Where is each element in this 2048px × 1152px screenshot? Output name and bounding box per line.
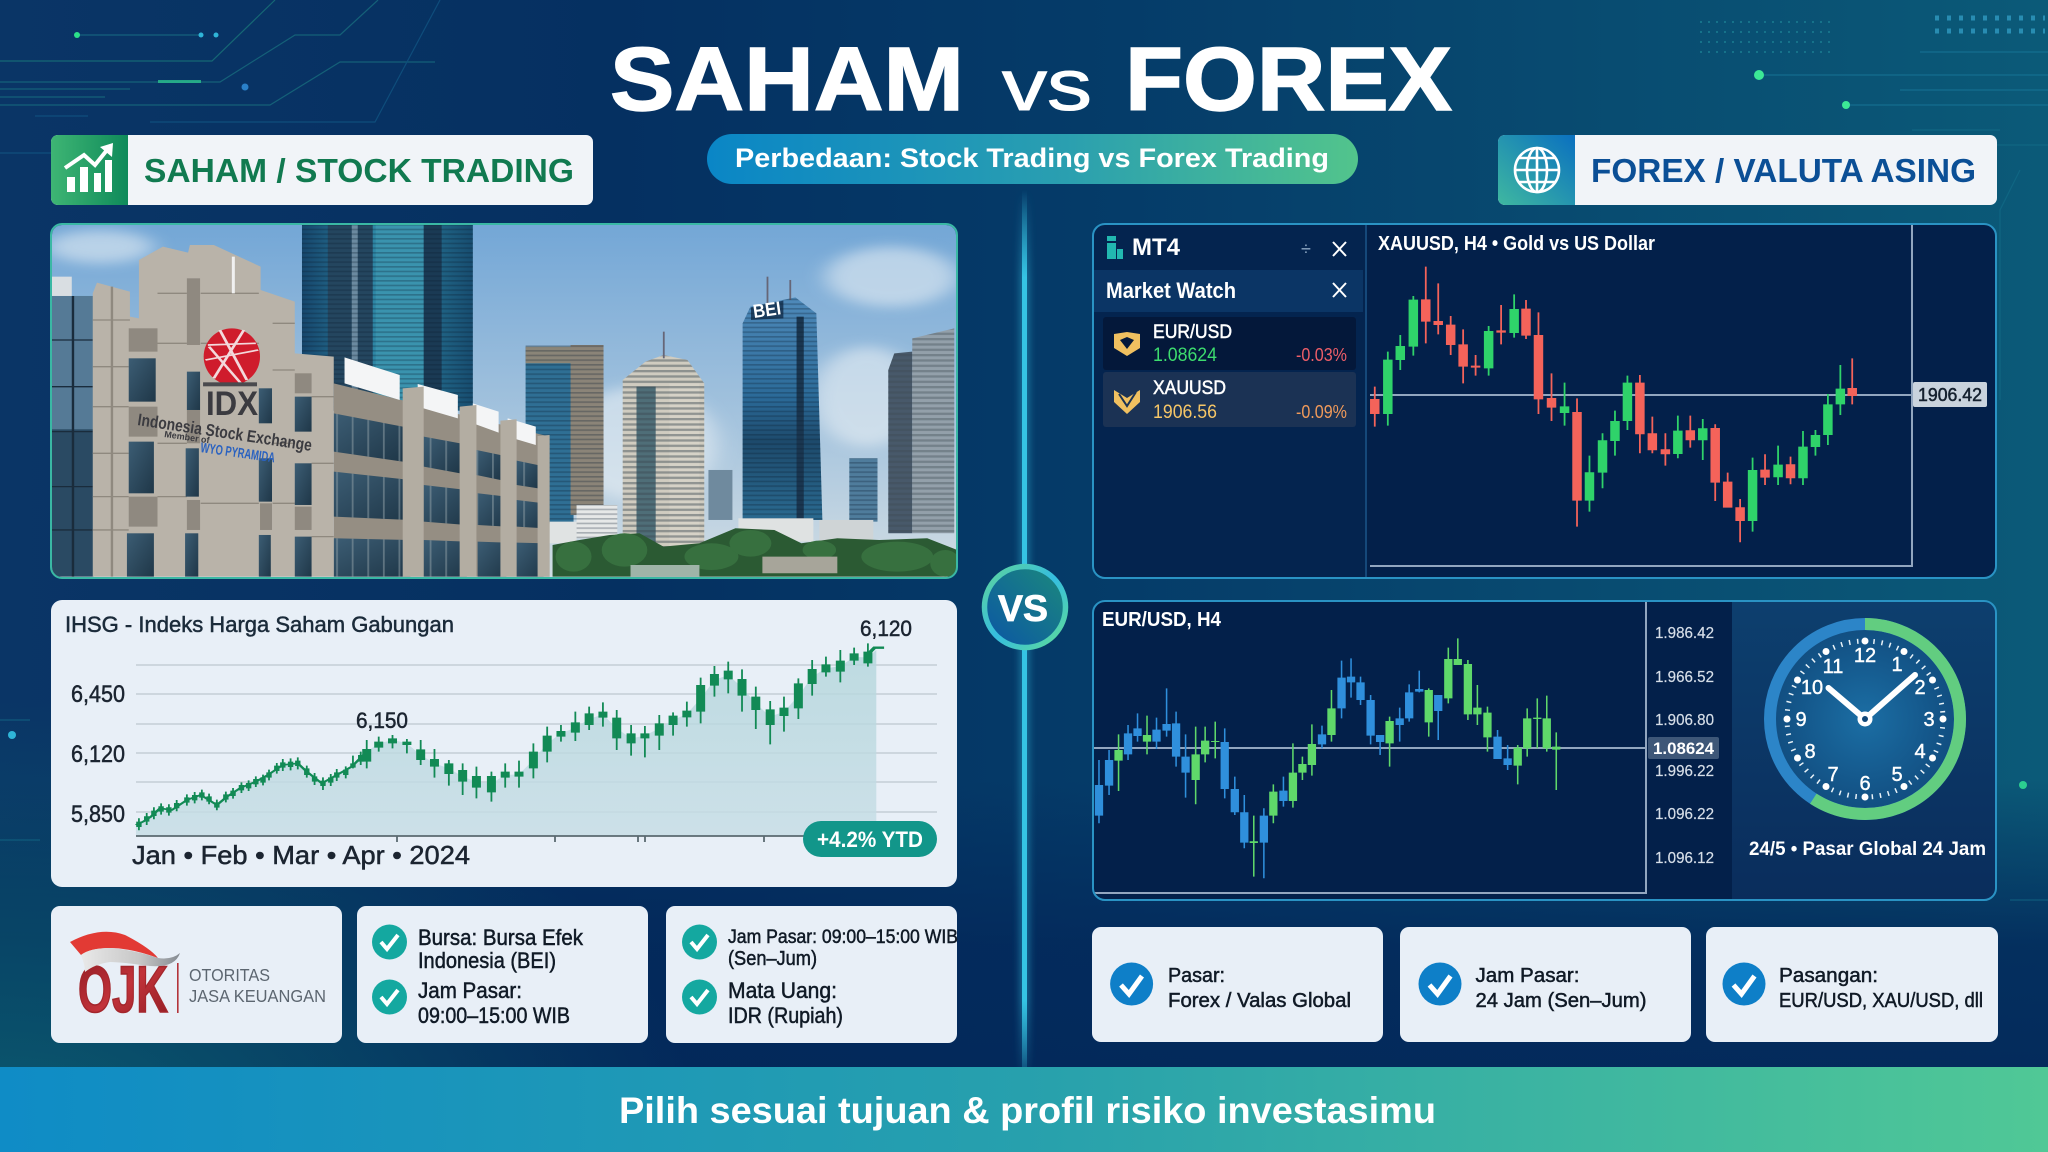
- icon: check: [1722, 962, 1766, 1006]
- card text: IDR (Rupiah): [728, 1003, 843, 1028]
- card: OJK logo: OTORITAS: [189, 965, 270, 985]
- chart frame: [1370, 224, 1912, 566]
- card text: 09:00–15:00 WIB: [418, 1003, 570, 1028]
- row: XAUUSD: 1906.56: [1153, 402, 1217, 423]
- header: forex / valuta asing: FOREX / VALUTA ASING: [1591, 152, 1976, 189]
- card text: Indonesia (BEI): [418, 948, 556, 973]
- icon: clock: 1: [1891, 654, 1903, 676]
- icon: rising chart: [65, 143, 113, 192]
- price axis labels: 1.996.22: [1655, 763, 1714, 780]
- icon: close: [1333, 242, 1346, 256]
- price axis labels: 1.966.52: [1655, 669, 1714, 686]
- price label: 1.08624: [1653, 739, 1715, 758]
- price label: 1906.42: [1918, 385, 1982, 405]
- card text: EUR/USD, XAU/USD, dll: [1779, 990, 1983, 1012]
- IDX sphere: [204, 328, 260, 385]
- VS badge: VS: [998, 588, 1048, 629]
- sidebar: MT4: [1132, 234, 1181, 261]
- panel: IHSG chart: [51, 600, 957, 887]
- chart title: XAUUSD, H4 • Gold vs US Dollar: [1378, 233, 1655, 255]
- ytd badge: +4.2% YTD: [817, 827, 923, 852]
- chart: gold candlesticks: [1375, 267, 1852, 542]
- icon: MT4 bars: [1107, 236, 1123, 259]
- title: SAHAM: [610, 30, 964, 130]
- chart title: EUR/USD, H4: [1102, 609, 1222, 631]
- card text: Pasar:: [1168, 965, 1225, 987]
- row: XAUUSD: [1103, 372, 1356, 427]
- card: pasangan forex: [1706, 927, 1998, 1042]
- header: forex / valuta asing: [1498, 135, 1997, 205]
- icon: check: [1110, 962, 1153, 1006]
- icon: close: [1333, 283, 1346, 297]
- footer banner: [0, 1067, 2048, 1152]
- panel: stock exchange photo: Member of: [164, 429, 211, 445]
- axis labels: [71, 616, 912, 870]
- price axis labels: 1.986.42: [1655, 625, 1714, 642]
- subtitle pill: [707, 134, 1358, 184]
- card text: [1168, 965, 1351, 1012]
- header: saham / stock trading: SAHAM / STOCK TRADING: [144, 152, 574, 189]
- card text: [418, 925, 584, 1028]
- icon: flag: [70, 932, 180, 972]
- icon: check: [682, 980, 717, 1014]
- header: saham / stock trading: [51, 135, 593, 205]
- icon: check: [372, 980, 407, 1014]
- icon: clock: 6: [1859, 773, 1871, 795]
- card text: Bursa: Bursa Efek: [418, 925, 584, 950]
- axis labels: Jan • Feb • Mar • Apr • 2024: [132, 840, 470, 870]
- axis labels: 5,850: [71, 801, 125, 828]
- card text: Jam Pasar:: [418, 978, 522, 1003]
- grid lines: [136, 665, 937, 812]
- row: EUR/USD: -0.03%: [1296, 345, 1347, 365]
- price axis labels: 1.096.22: [1655, 806, 1714, 823]
- sidebar: ÷: [1301, 239, 1311, 259]
- row: EUR/USD: [1103, 317, 1356, 370]
- axis: [136, 836, 880, 842]
- icon: check: [1418, 962, 1462, 1006]
- card: OJK logo: [51, 906, 342, 1043]
- card: jam pasar info: [666, 906, 958, 1043]
- card text: Forex / Valas Global: [1168, 990, 1351, 1012]
- wing: [334, 383, 550, 577]
- chart: area and candlesticks: [136, 643, 884, 836]
- icon: clock: 2: [1914, 677, 1926, 699]
- card text: Mata Uang:: [728, 978, 837, 1003]
- icon: clock: 10: [1801, 677, 1823, 699]
- icon: clock: 12: [1854, 645, 1876, 667]
- row: XAUUSD: XAUUSD: [1153, 378, 1226, 399]
- trees: [553, 528, 957, 577]
- IDX sign text: IDX: [206, 385, 258, 423]
- divider: vertical line: [1020, 190, 1029, 1070]
- axis labels: 6,120: [71, 741, 125, 768]
- card text: (Sen–Jum): [728, 948, 817, 970]
- VS badge: [984, 566, 1066, 648]
- BEI sign: BEI: [752, 298, 782, 323]
- ytd badge: [803, 821, 937, 857]
- axis labels: 6,450: [71, 681, 125, 708]
- icon: clock: 7: [1827, 764, 1839, 786]
- icon: clock: 9: [1795, 709, 1807, 731]
- card text: [1476, 965, 1646, 1012]
- panel: EUR/USD chart and clock: [1093, 601, 1996, 900]
- card text: [728, 927, 958, 1028]
- icon: clock: 5: [1891, 764, 1903, 786]
- card text: Pasangan:: [1779, 965, 1878, 987]
- chart title: IHSG - Indeks Harga Saham Gabungan: [65, 612, 454, 637]
- card text: [1779, 965, 1983, 1012]
- price axis labels: 1.096.12: [1655, 850, 1714, 867]
- price axis labels: [1655, 625, 1714, 867]
- icon: check: [682, 924, 717, 960]
- title: vs: [1002, 46, 1092, 126]
- left glass: [51, 277, 72, 297]
- decorative circuit lines: [0, 0, 2048, 900]
- card: pasar forex: [1092, 927, 1383, 1042]
- sidebar: Market Watch: [1106, 278, 1236, 303]
- row: XAUUSD: -0.09%: [1296, 402, 1347, 422]
- panel: stock exchange photo: Indonesia Stock Exchange: [136, 410, 313, 455]
- card: bursa info: [357, 906, 648, 1043]
- subtitle pill: Perbedaan: Stock Trading vs Forex Trading: [735, 143, 1329, 173]
- card text: Jam Pasar: 09:00–15:00 WIB: [728, 927, 958, 948]
- footer banner: Pilih sesuai tujuan & profil risiko investasimu: [619, 1090, 1436, 1131]
- axis labels: 6,150: [356, 708, 408, 733]
- row: EUR/USD: 1.08624: [1153, 345, 1217, 366]
- panel: stock exchange photo: [40, 220, 980, 583]
- card: OJK logo: OJK: [78, 952, 168, 1026]
- far towers: [302, 224, 473, 411]
- card text: Jam Pasar:: [1476, 965, 1580, 987]
- main facade: [93, 245, 334, 577]
- card: OJK logo: JASA KEUANGAN: [189, 986, 326, 1006]
- icon: check: [372, 924, 407, 960]
- title: [610, 30, 1452, 130]
- chart: EUR/USD candlesticks: [1099, 638, 1556, 878]
- price axis labels: 1.906.80: [1655, 712, 1714, 729]
- icon: clock: 8: [1804, 741, 1816, 763]
- panel: MT4 terminal: [1093, 224, 1996, 578]
- icon: clock: 11: [1823, 656, 1843, 678]
- decorative dots: [8, 18, 2045, 789]
- title: FOREX: [1125, 30, 1452, 130]
- panel: stock exchange photo: WYO PYRAMIDA: [200, 439, 276, 465]
- card text: 24 Jam (Sen–Jum): [1476, 990, 1646, 1012]
- card: jam pasar forex: [1400, 927, 1691, 1042]
- icon: globe: [1515, 148, 1559, 192]
- sidebar: [1094, 225, 1367, 577]
- icon: clock: [1770, 624, 1960, 814]
- icon: clock: 3: [1923, 709, 1935, 731]
- row: EUR/USD: EUR/USD: [1153, 322, 1232, 343]
- icon: clock: 4: [1914, 741, 1926, 763]
- clock caption: 24/5 • Pasar Global 24 Jam: [1749, 839, 1986, 860]
- axis labels: 6,120: [860, 616, 912, 641]
